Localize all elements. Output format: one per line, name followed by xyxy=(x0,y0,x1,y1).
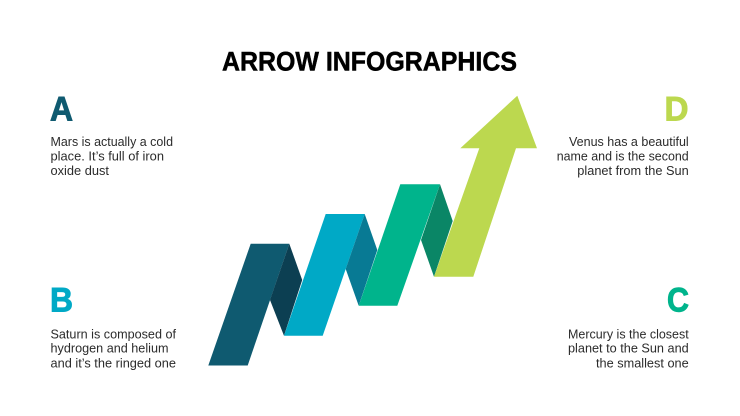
ribbon segment: dark teal xyxy=(208,244,289,366)
text: B description: Saturn is composed of xyxy=(50,326,176,341)
text: B description: and it’s the ringed one xyxy=(50,355,176,370)
fold: green xyxy=(421,184,453,277)
text: D description: planet from the Sun xyxy=(577,163,689,178)
panel: A xyxy=(50,91,173,178)
ribbon segment: green xyxy=(359,184,440,306)
text: A description: place. It’s full of iron xyxy=(50,148,164,164)
text: A description xyxy=(50,134,173,178)
arrow head: lime xyxy=(434,96,537,277)
text: A description: Mars is actually a cold xyxy=(50,134,173,149)
text: D description: name and is the second xyxy=(557,148,689,164)
ribbon segment: blue xyxy=(284,214,365,336)
text: A description: oxide dust xyxy=(50,163,109,178)
text: C description: the smallest one xyxy=(596,355,689,370)
fold: blue xyxy=(346,214,377,306)
text: C description: planet to the Sun and xyxy=(568,341,689,356)
text: D description xyxy=(557,134,689,178)
title: ARROW INFOGRAPHICS xyxy=(222,46,517,76)
panel: C xyxy=(568,282,689,370)
panel: B xyxy=(50,282,176,370)
letter B: B xyxy=(50,282,73,320)
fold: dark teal xyxy=(270,244,302,336)
text: B description: hydrogen and helium xyxy=(50,341,168,356)
panel: D xyxy=(557,91,689,178)
text: B description xyxy=(50,326,176,370)
letter A: A xyxy=(50,91,73,129)
arrow: zigzag ribbon xyxy=(208,96,537,365)
text: C description: Mercury is the closest xyxy=(568,326,689,341)
letter C: C xyxy=(667,282,689,320)
text: C description xyxy=(568,326,689,370)
text: D description: Venus has a beautiful xyxy=(569,134,689,149)
letter D: D xyxy=(664,91,688,129)
